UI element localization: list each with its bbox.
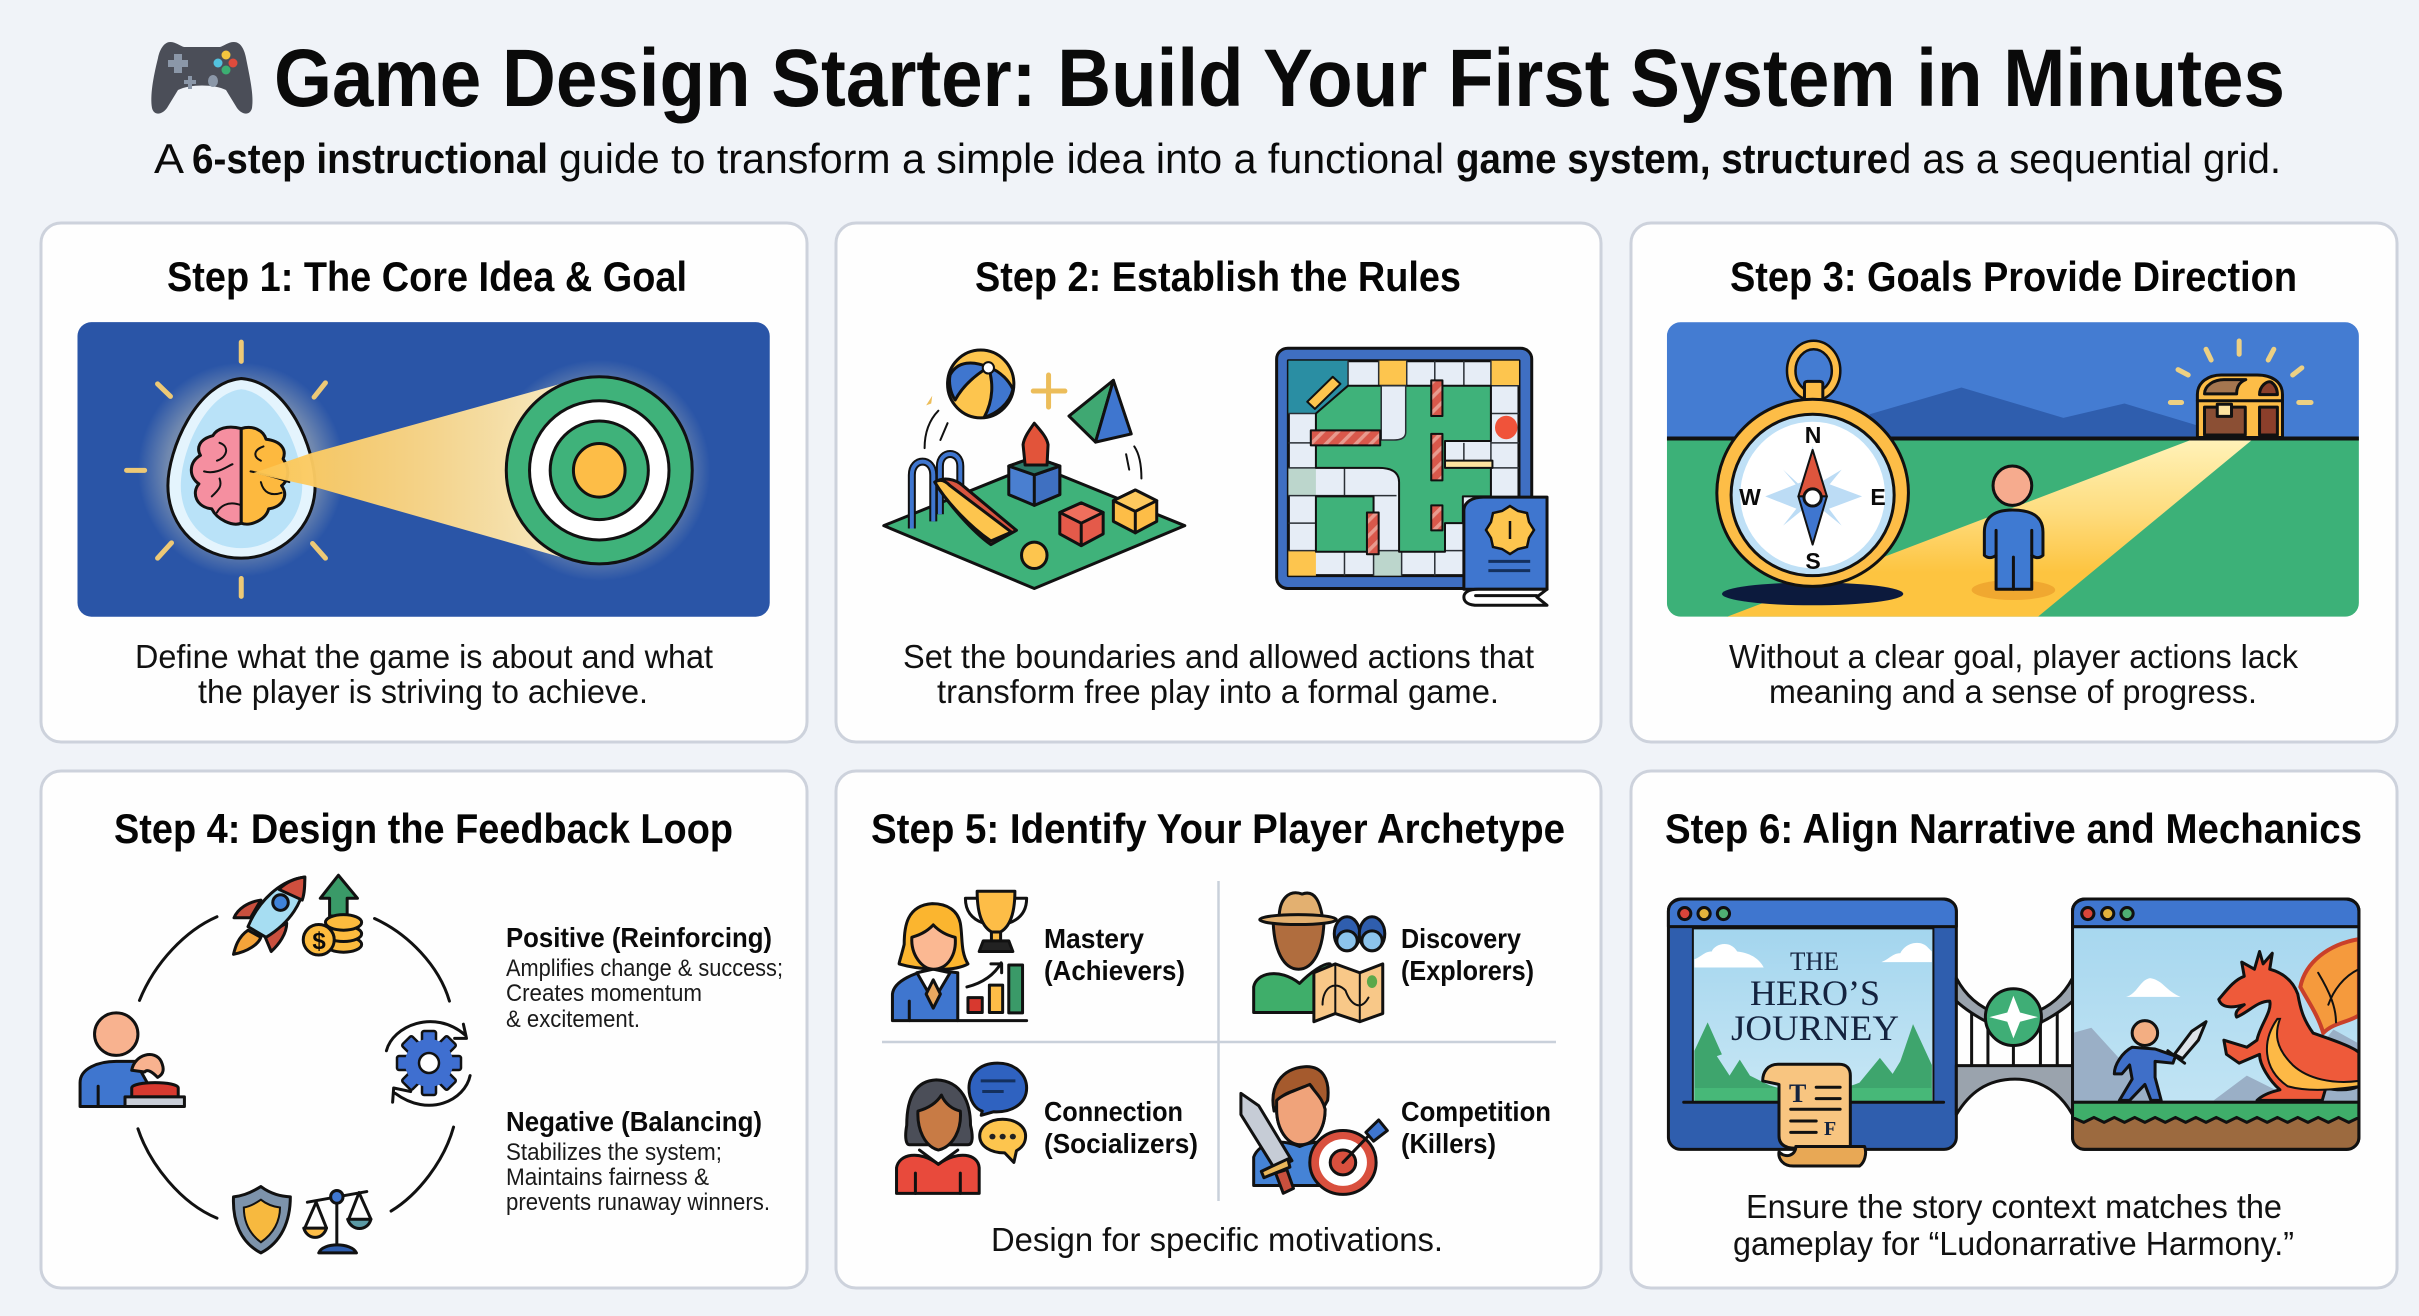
description: transform free play into a formal game. [937, 673, 1499, 710]
story title: HERO’S [1750, 973, 1880, 1013]
text: negative loop: Negative (Balancing) [506, 1106, 762, 1137]
labels: explorers [1401, 923, 1534, 986]
icon: gear [397, 1031, 461, 1095]
labels: socializers: (Socializers) [1044, 1128, 1198, 1159]
text: positive loop: Positive (Reinforcing) [506, 922, 772, 953]
illustration: free play playground [884, 350, 1185, 589]
text: positive loop: Amplifies change & success; [506, 955, 783, 982]
labels: explorers: (Explorers) [1401, 955, 1534, 986]
description [1729, 638, 2298, 710]
story title: JOURNEY [1731, 1008, 1899, 1048]
labels: achievers: (Achievers) [1044, 955, 1185, 986]
card background [1631, 223, 2397, 742]
icon: socializer with chat bubbles [897, 1063, 1027, 1193]
panel: step 6 [1631, 771, 2397, 1288]
heading: Step 5: Identify Your Player Archetype [871, 805, 1565, 852]
labels: killers: Competition [1401, 1096, 1551, 1127]
compass letters: E [1870, 484, 1886, 510]
description [1733, 1188, 2294, 1262]
description: Design for specific motivations. [991, 1221, 1443, 1258]
labels: killers [1401, 1096, 1551, 1159]
icon: explorer with map and binoculars [1254, 893, 1385, 1022]
text: positive loop: Creates momentum [506, 980, 702, 1007]
description: Set the boundaries and allowed actions that [903, 638, 1534, 675]
description: Define what the game is about and what [135, 638, 713, 675]
labels: killers: (Killers) [1401, 1128, 1496, 1159]
card background [836, 223, 1601, 742]
story title: THE [1790, 947, 1839, 976]
labels: socializers [1044, 1096, 1198, 1159]
icon: achiever with trophy and chart [892, 891, 1027, 1021]
labels: explorers: Discovery [1401, 923, 1521, 954]
labels: achievers: Mastery [1044, 923, 1144, 954]
panel: step 4 [41, 771, 807, 1288]
heading: Step 4: Design the Feedback Loop [114, 805, 733, 852]
description: Ensure the story context matches the [1746, 1188, 2282, 1225]
panel: step 5 [836, 771, 1601, 1288]
icon: dollar sign: $ [312, 928, 326, 955]
labels: socializers: Connection [1044, 1096, 1183, 1127]
scroll letters [1789, 1079, 1836, 1140]
heading: Step 1: The Core Idea & Goal [167, 253, 687, 300]
header [151, 33, 2285, 182]
illustration: rule board and book [1277, 348, 1547, 605]
card background [41, 223, 807, 742]
illustration: idea to target [77, 322, 770, 617]
scroll letters: T [1789, 1079, 1806, 1108]
subtitle: d as a sequential grid. [1889, 135, 2281, 182]
card background [836, 771, 1601, 1288]
description [903, 638, 1534, 710]
illustration: compass, player and treasure [1667, 322, 2359, 617]
panel: step 1 [41, 223, 807, 742]
subtitle: guide to transform a simple idea into a functional [559, 135, 1444, 182]
subtitle: 6-step instructional [192, 135, 548, 182]
compass letters: N [1805, 422, 1821, 448]
icon: game controller [151, 42, 253, 114]
compass letters: W [1739, 484, 1761, 510]
illustration: gameplay window with dragon [2073, 899, 2359, 1149]
heading: Step 6: Align Narrative and Mechanics [1665, 805, 2362, 852]
heading: Step 3: Goals Provide Direction [1730, 253, 2297, 300]
labels: achievers [1044, 923, 1185, 986]
subtitle: A [154, 135, 184, 182]
text: positive loop: & excitement. [506, 1006, 640, 1033]
description: gameplay for “Ludonarrative Harmony.” [1733, 1225, 2294, 1262]
text: negative loop [506, 1106, 770, 1216]
story title [1731, 947, 1899, 1048]
panel: step 2 [836, 223, 1601, 742]
description: meaning and a sense of progress. [1769, 673, 2257, 710]
illustration: story window [1668, 899, 1956, 1149]
text: negative loop: Stabilizes the system; [506, 1139, 722, 1166]
description: Without a clear goal, player actions lack [1729, 638, 2298, 675]
icon: rule book badge [1486, 506, 1534, 554]
compass letters [1739, 422, 1886, 574]
diagram: feedback loop [80, 875, 470, 1253]
card background [1631, 771, 2397, 1288]
illustration: scroll [1763, 1064, 1866, 1166]
icon: killer with sword and target [1241, 1067, 1387, 1194]
scroll letters: F [1824, 1118, 1836, 1140]
illustration: bridge [1956, 978, 2073, 1115]
text: negative loop: Maintains fairness & [506, 1164, 709, 1191]
description: the player is striving to achieve. [198, 673, 648, 710]
card background [41, 771, 807, 1288]
description [135, 638, 713, 710]
subtitle: game system, structure [1456, 135, 1888, 182]
text: positive loop [506, 922, 783, 1033]
text: negative loop: prevents runaway winners. [506, 1189, 770, 1216]
heading: Step 2: Establish the Rules [975, 253, 1461, 300]
panel: step 3 [1631, 223, 2397, 742]
subtitle [154, 135, 2281, 182]
compass letters: S [1805, 548, 1821, 574]
